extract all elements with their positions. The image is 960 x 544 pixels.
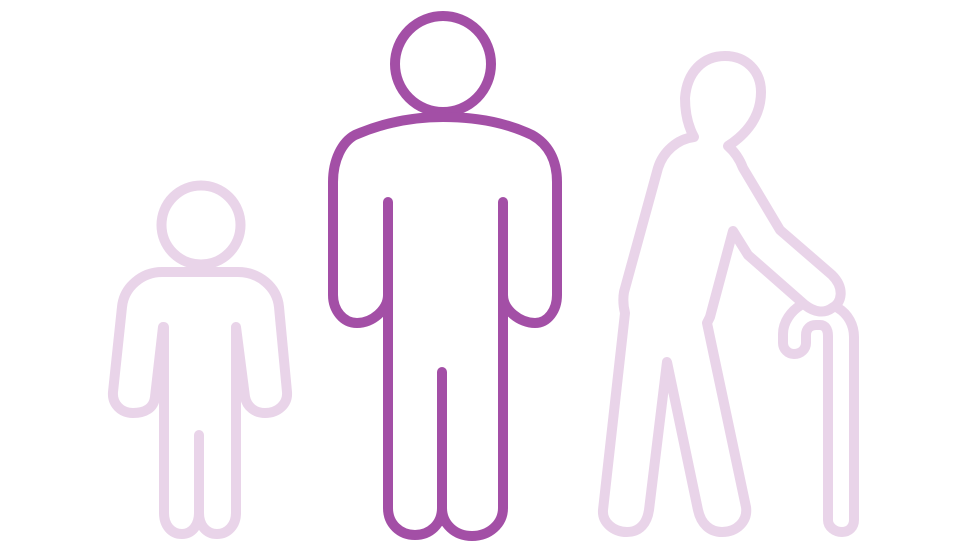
older person body	[603, 56, 841, 532]
icon: child figure	[113, 186, 287, 534]
cane	[783, 305, 854, 532]
adult body	[333, 117, 557, 536]
adult head	[395, 16, 491, 112]
icon: adult figure (highlighted)	[333, 16, 557, 536]
icon: older person with cane	[603, 56, 854, 532]
child body	[113, 272, 287, 534]
child head	[162, 186, 240, 264]
